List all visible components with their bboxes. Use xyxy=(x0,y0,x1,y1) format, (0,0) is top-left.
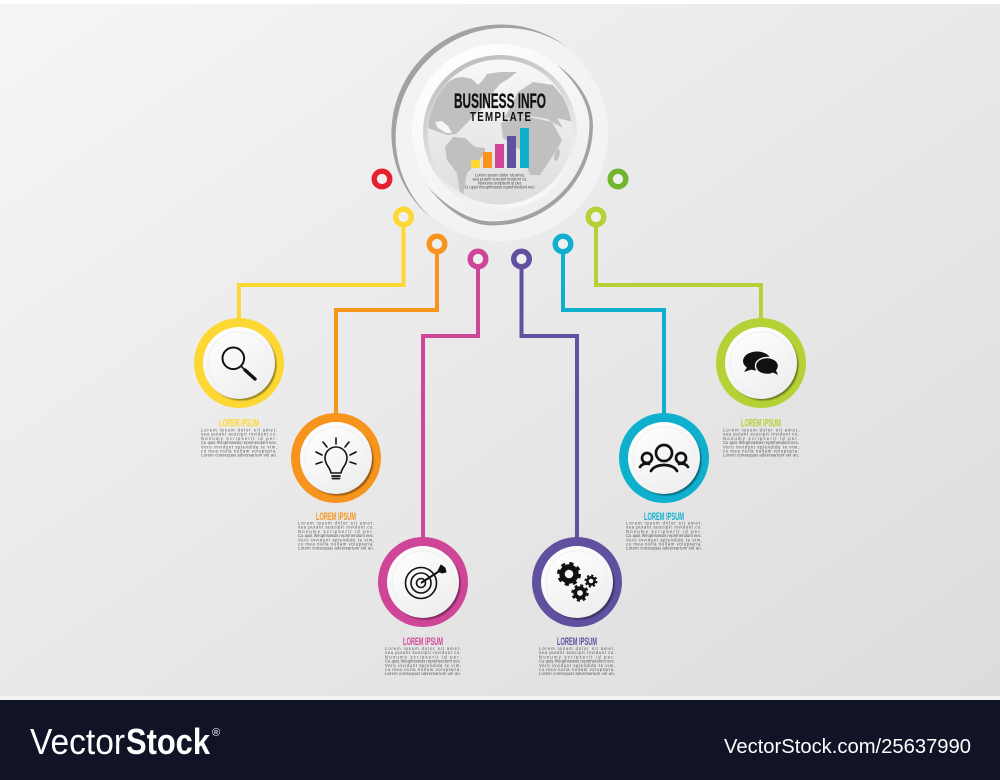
red dot xyxy=(374,171,390,187)
text: chat: Nonumy scripserit id per. xyxy=(723,436,799,441)
text: gears xyxy=(539,636,615,676)
panel: people xyxy=(619,413,709,503)
icon: gears xyxy=(558,564,597,600)
purple connector xyxy=(514,251,577,540)
text: idea xyxy=(298,511,374,551)
panel: search xyxy=(194,318,284,408)
text: people: LOREM IPSUM xyxy=(644,511,684,523)
text: search: Nonumy scripserit id per. xyxy=(201,436,277,441)
title: TEMPLATE xyxy=(470,111,531,124)
text: idea: cu mea nulla nullam voluptaria. xyxy=(298,542,374,546)
text: gears: LOREM IPSUM xyxy=(557,636,597,648)
lime connector xyxy=(588,209,761,322)
text: target: cu mea nulla nullam voluptaria. xyxy=(385,667,461,672)
text: people: cu mea nulla nullam voluptaria. xyxy=(626,542,702,546)
text: chat: Lorem consequat adversarium vel an. xyxy=(723,453,799,458)
text: target: Cu quis theophrastus reprehendunt nec. xyxy=(385,659,461,664)
text: idea: sea putant suscipit invidunt cu. xyxy=(298,525,374,530)
text: gears: sea putant suscipit invidunt cu. xyxy=(539,650,615,655)
text: gears: Lorem consequat adversarium vel an. xyxy=(539,671,615,676)
text: target: Nonumy scripserit id per. xyxy=(385,654,461,659)
text: chat xyxy=(723,418,799,458)
pink connector xyxy=(423,251,486,540)
text: chat: sea putant suscipit invidunt cu. xyxy=(723,432,799,437)
text: chat: Vero invidunt splendide te vim, xyxy=(723,444,799,449)
caption: Nonumy scripserit id per. xyxy=(478,180,522,186)
title xyxy=(454,90,546,124)
text: search: Lorem consequat adversarium vel an. xyxy=(201,453,277,458)
text: people: Cu quis theophrastus reprehendunt nec. xyxy=(626,533,702,538)
text: search: LOREM IPSUM xyxy=(219,418,259,430)
caption: sea putant suscipit invidunt cu. xyxy=(472,176,528,182)
text: target xyxy=(385,636,461,676)
text: chat: cu mea nulla nullam voluptaria. xyxy=(723,448,799,454)
text: people: Lorem consequat adversarium vel an. xyxy=(626,546,702,551)
footer logo xyxy=(30,721,220,762)
text: chat: LOREM IPSUM xyxy=(741,418,781,430)
text: chat: Lorem ipsum dolor sit amet, xyxy=(723,428,799,432)
text: idea: Cu quis theophrastus reprehendunt nec. xyxy=(298,533,374,538)
panel: target xyxy=(378,537,468,627)
footer logo: Vector xyxy=(30,721,125,762)
text: gears: Vero invidunt splendide te vim, xyxy=(539,663,615,668)
text: search: cu mea nulla nullam voluptaria. xyxy=(201,448,277,454)
text: people: Lorem ipsum dolor sit amet, xyxy=(626,520,702,526)
text: target: Vero invidunt splendide te vim, xyxy=(385,663,461,668)
footer bar xyxy=(0,696,1000,780)
footer logo: Stock xyxy=(126,721,211,762)
text: target: LOREM IPSUM xyxy=(403,636,443,648)
text: target: Lorem ipsum dolor sit amet, xyxy=(385,646,461,651)
caption xyxy=(464,172,536,190)
text: gears: Lorem ipsum dolor sit amet, xyxy=(539,646,615,651)
title: BUSINESS INFO xyxy=(454,90,546,113)
text: people xyxy=(626,511,702,551)
text: gears: Cu quis theophrastus reprehendunt nec. xyxy=(539,659,615,664)
text: chat: Cu quis theophrastus reprehendunt nec. xyxy=(723,440,799,445)
text: idea: Lorem consequat adversarium vel an. xyxy=(298,546,374,551)
bar chart xyxy=(471,128,529,168)
caption: Lorem ipsum dolor sit amet, xyxy=(475,172,525,178)
orange connector xyxy=(336,236,445,416)
icon: people xyxy=(640,445,688,471)
text: idea: LOREM IPSUM xyxy=(316,511,356,523)
text: people: Vero invidunt splendide te vim, xyxy=(626,537,702,542)
green dot xyxy=(610,171,626,187)
text: gears: Nonumy scripserit id per. xyxy=(539,654,615,659)
icon: light bulb xyxy=(316,438,356,478)
text: idea: Lorem ipsum dolor sit amet, xyxy=(298,520,374,526)
text: idea: Nonumy scripserit id per. xyxy=(298,529,374,534)
footer logo: ® xyxy=(212,727,220,739)
caption: Cu quis theophrastus reprehendunt nec. xyxy=(464,184,536,190)
panel: idea xyxy=(291,413,381,503)
text: search: Lorem ipsum dolor sit amet, xyxy=(201,428,277,432)
text: search: Vero invidunt splendide te vim, xyxy=(201,444,277,449)
text: search: Cu quis theophrastus reprehendunt nec. xyxy=(201,440,277,445)
icon: magnifier xyxy=(222,348,255,379)
text: search xyxy=(201,418,277,458)
panel: gears xyxy=(532,537,622,627)
yellow connector xyxy=(239,209,411,322)
text: gears: cu mea nulla nullam voluptaria. xyxy=(539,667,615,672)
footer id: VectorStock.com/25637990 xyxy=(724,736,971,758)
panel: chat xyxy=(716,318,806,408)
cyan connector xyxy=(555,236,664,416)
icon: target xyxy=(406,565,446,598)
text: idea: Vero invidunt splendide te vim, xyxy=(298,537,374,542)
text: target: sea putant suscipit invidunt cu. xyxy=(385,650,461,655)
text: target: Lorem consequat adversarium vel an. xyxy=(385,671,461,676)
text: people: Nonumy scripserit id per. xyxy=(626,529,702,534)
icon: chat bubbles xyxy=(743,352,778,375)
text: search: sea putant suscipit invidunt cu. xyxy=(201,432,277,437)
world map xyxy=(425,72,573,195)
main badge xyxy=(391,25,608,241)
text: people: sea putant suscipit invidunt cu. xyxy=(626,525,702,530)
